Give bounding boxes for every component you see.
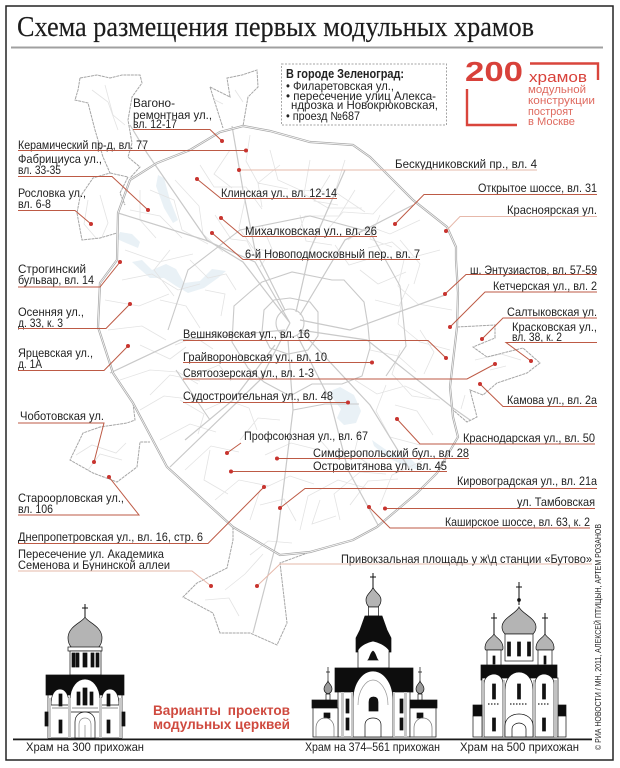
label: Вагоноремонтная: ремонтная ул., [133,108,212,122]
icon: church for 374-561 parishioners [312,573,437,737]
label: Красковская: вл. 38, к. 2 [512,330,562,344]
label: Староорловская: Староорловская ул., [18,491,124,505]
label: Клинская: Клинская ул., вл. 12-14 [221,186,337,200]
label: Михалковская: Михалковская ул., вл. 26 [245,224,377,238]
label: Осенняя: Осенняя ул., [18,305,84,319]
label: Пересечение: Пересечение ул. Академика [18,547,164,561]
label: Красноярская: Красноярская ул. [507,203,597,217]
label: Строгинский: бульвар, вл. 14 [18,273,94,287]
label: Тамбовская [383,495,595,510]
label: Вагоноремонтная: вл. 12-17 [133,117,177,131]
label: Каширское шоссе [367,505,590,529]
label: Рословка: вл. 6-8 [18,197,51,211]
major roads [110,125,470,633]
label: Краснодарская [395,417,595,445]
title rule [11,46,603,48]
label: Кетчерская: Кетчерская ул., вл. 2 [493,279,597,293]
label: 6-й Новоподмосковный [210,231,420,261]
label: Вагоноремонтная: Вагоно- [133,96,175,110]
label: Вагоноремонтная [133,96,224,143]
callout: 200 temples [465,56,598,128]
panel: Zelenograd addresses: • пересечение улиц Алекса- [286,89,436,103]
callout: 200 temples: построят [528,106,573,118]
callout: 200 temples: в Москве [528,116,575,128]
label: Открытое шоссе [393,181,597,226]
label: Симферопольский: Симферопольский бул., вл. 28 [313,446,469,460]
label: Бескудниковский: Бескудниковский пр., вл. 4 [395,157,537,171]
rivers and reservoirs [117,175,422,470]
label: Краснодарская: Краснодарская ул., вл. 50 [463,431,595,445]
label: шоссе Энтузиастов: ш. Энтузиастов, вл. 57-59 [470,263,597,277]
label: Фабрициуса [18,152,150,212]
label: Чоботовская [18,409,104,464]
callout: 200 temples: модульной [528,84,586,96]
label: Вешняковская [183,327,448,360]
label: Кировоградская: Кировоградская ул., вл. 21а [457,474,597,488]
label: Каширское шоссе: Каширское шоссе, вл. 63, к. 2 [445,515,590,529]
MKAD ring road [98,126,458,555]
label: Красноярская [444,203,597,233]
label: Фабрициуса: Фабрициуса ул., [18,152,102,166]
label: Днепропетровская [18,485,266,544]
icon: church for 500 parishioners [473,582,566,737]
label: Староорловская [18,475,139,516]
panel: Zelenograd addresses: В городе Зеленоград: [286,67,404,81]
label: Строгинский [18,260,122,287]
label: Рословка: Рословка ул., [18,186,86,200]
label: Днепропетровская: Днепропетровская ул., вл. 16, стр. 6 [18,530,203,544]
label: шоссе Энтузиастов [443,263,597,296]
map of Moscow [70,70,540,645]
label: Салтыковская: Салтыковская ул. [507,305,597,319]
label: Осенняя [18,302,132,330]
panel: Zelenograd addresses: • Филаретовская ул., [286,79,394,93]
label: Пересечение: Семенова и Бунинской аллеи [18,558,170,572]
credit: © РИА НОВОСТИ / МН, 2011, АЛЕКСЕЙ ПТИЦЫН, АРТЕМ РОЗАНОВ [594,524,603,750]
label: 6-й Новоподмосковный: 6-й Новоподмосковный пер., вл. 7 [245,247,420,261]
caption: 500: Храм на 500 прихожан [460,740,579,754]
label: Святоозерская: Святоозерская ул., вл. 1-3 [183,366,314,380]
label: Островитянова [229,459,447,474]
ring roads [168,216,406,420]
label: Святоозерская [183,362,497,380]
ground line [13,738,592,740]
label: Керамический: Керамический пр-д, вл. 77 [18,138,148,152]
label: Тамбовская: ул. Тамбовская [517,495,595,509]
label: Грайвороновская: Грайвороновская ул., вл. 10 [183,350,327,364]
label: Строгинский: Строгинский [18,262,86,276]
label: Кировоградская [278,474,597,510]
label: Салтыковская [480,305,597,341]
label: Фабрициуса: вл. 33-35 [18,163,61,177]
callout: 200 temples: 200 [465,56,523,87]
label: Рословка [18,186,93,226]
label: Бескудниковский [237,157,537,172]
label: Профсоюзная: Профсоюзная ул., вл. 67 [244,429,368,443]
heading: project variants [153,703,290,732]
title: Схема размещения первых модульных храмов [17,12,534,43]
label: Михалковская [219,216,377,238]
label: Ярцевская: д. 1А [18,357,42,371]
label: Староорловская: вл. 106 [18,502,53,516]
Moscow boundary outline [70,70,540,645]
label: Ярцевская [18,344,130,371]
label: Клинская [195,177,337,200]
panel: Zelenograd addresses: • проезд №687 [286,109,360,123]
label: Керамический [18,138,248,152]
label: Осенняя: д. 33, к. 3 [18,316,63,330]
label: Судостроительная: Судостроительная ул., вл. 48 [183,389,333,403]
caption: 300: Храм на 300 прихожан [26,740,144,754]
label: Профсоюзная [225,429,368,455]
label: Вешняковская: Вешняковская ул., вл. 16 [183,327,310,341]
label: Привокзальная: Привокзальная площадь у ж\д станции «Бутово» [341,552,592,566]
panel: Zelenograd addresses [282,64,446,125]
label: Камова: Камова ул., вл. 2а [507,393,597,407]
caption: 374-561: Храм на 374–561 прихожан [305,740,440,754]
panel: Zelenograd addresses: ндрозка и Новокрюковская, [291,98,438,112]
label: Привокзальная [255,552,592,588]
heading: project variants: Варианты проектов [153,703,290,718]
callout: 200 temples: конструкции [528,95,595,107]
label: Открытое шоссе: Открытое шоссе, вл. 31 [478,181,597,195]
minor streets [76,85,521,616]
icon: church for 300 parishioners [45,604,125,738]
label: Камова [478,382,597,407]
heading: project variants: модульных церквей [153,717,290,732]
label: Ярцевская: Ярцевская ул., [18,346,93,360]
label: Островитянова: Островитянова ул., вл. 45 [313,459,447,473]
label: Чоботовская: Чоботовская ул. [20,409,104,423]
label: Красковская [506,320,597,363]
label: Кетчерская [448,279,597,329]
label: Пересечение [18,547,213,588]
label: Красковская: Красковская ул., [512,320,597,334]
callout: 200 temples: храмов [529,69,587,86]
